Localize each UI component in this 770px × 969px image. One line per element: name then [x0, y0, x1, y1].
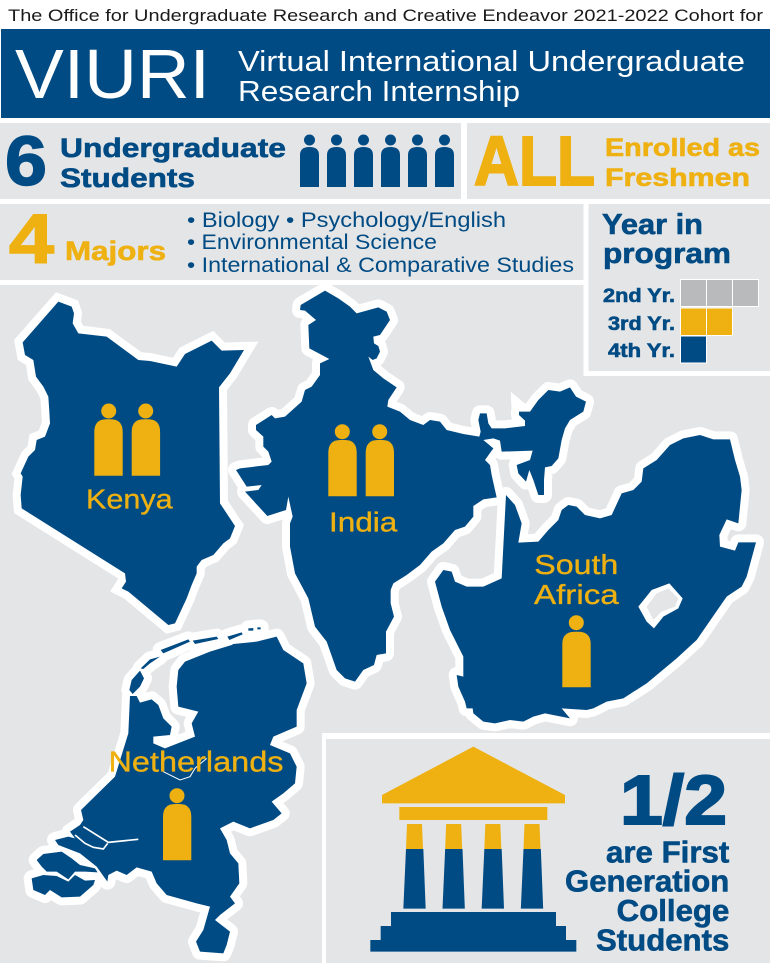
label: South Africa: Africa [534, 579, 619, 610]
list of majors: • Environmental Science [187, 230, 437, 254]
heading: year in program [602, 209, 731, 270]
stat label: enrolled as freshmen: Freshmen [605, 164, 750, 192]
icon: college building [370, 747, 576, 952]
map: India [236, 291, 586, 682]
panel: all enrolled as freshmen [467, 122, 770, 200]
list of majors [187, 208, 574, 277]
stat label: enrolled as freshmen: Enrolled as [605, 134, 760, 162]
icon: one student, Netherlands [163, 788, 191, 860]
map: Kenya [21, 302, 244, 625]
row labels: 2nd Yr. [603, 286, 675, 307]
stat: ALL: ALL [474, 122, 595, 200]
label: South Africa [534, 549, 619, 610]
label: South Africa: South [534, 549, 618, 580]
stat label: first generation college students: are First [606, 834, 729, 869]
heading: year in program: program [603, 238, 731, 270]
stat label: first generation college students [565, 834, 729, 958]
label: Kenya: Kenya [86, 484, 173, 515]
list of majors: • Biology • Psychology/English [187, 208, 506, 232]
Lesotho cut-out [638, 583, 683, 628]
title: The Office for Undergraduate Research and Creative Endeavor 2021-2022 Cohort for [8, 6, 763, 25]
row labels [603, 286, 675, 362]
panel: VIURI header [1, 29, 770, 118]
stat label: undergraduate students [60, 133, 286, 193]
panel: year in program [588, 204, 770, 371]
map: Netherlands [32, 627, 307, 953]
stat label: first generation college students: College [617, 893, 729, 928]
heading: program name: Research Internship [238, 76, 520, 108]
row labels: 4th Yr. [608, 341, 675, 362]
row labels: 3rd Yr. [608, 314, 675, 335]
label: Netherlands: Netherlands [108, 746, 284, 778]
stat number: 6: 6 [5, 122, 47, 200]
icon: two students, Kenya [94, 404, 160, 476]
unit chart: years [680, 280, 758, 363]
stat label: first generation college students: Students [596, 923, 729, 958]
panel: 6 undergraduate students [0, 122, 461, 200]
label: India: India [329, 507, 398, 538]
icon: one student, South Africa [562, 615, 591, 687]
icon: two students, India [328, 424, 394, 496]
stat: 1/2: 1/2 [620, 761, 727, 839]
heading: VIURI: VIURI [15, 35, 210, 113]
stat label: enrolled as freshmen [605, 134, 760, 192]
heading: year in program: Year in [602, 209, 703, 241]
map: South Africa [435, 435, 756, 723]
list of majors: • International & Comparative Studies [187, 253, 574, 277]
panel: first generation background [326, 739, 770, 963]
stat label: undergraduate students: Undergraduate [60, 133, 286, 163]
stat number: 4: 4 [9, 200, 54, 278]
panel: map background [0, 285, 770, 963]
heading: program name [238, 46, 745, 108]
stat label: majors: Majors [65, 236, 166, 266]
icon: six students [300, 134, 454, 187]
stat label: first generation college students: Generation [565, 864, 729, 899]
panel: 4 majors [0, 200, 584, 280]
stat label: undergraduate students: Students [60, 163, 195, 193]
heading: program name: Virtual International Undergraduate [238, 46, 745, 78]
